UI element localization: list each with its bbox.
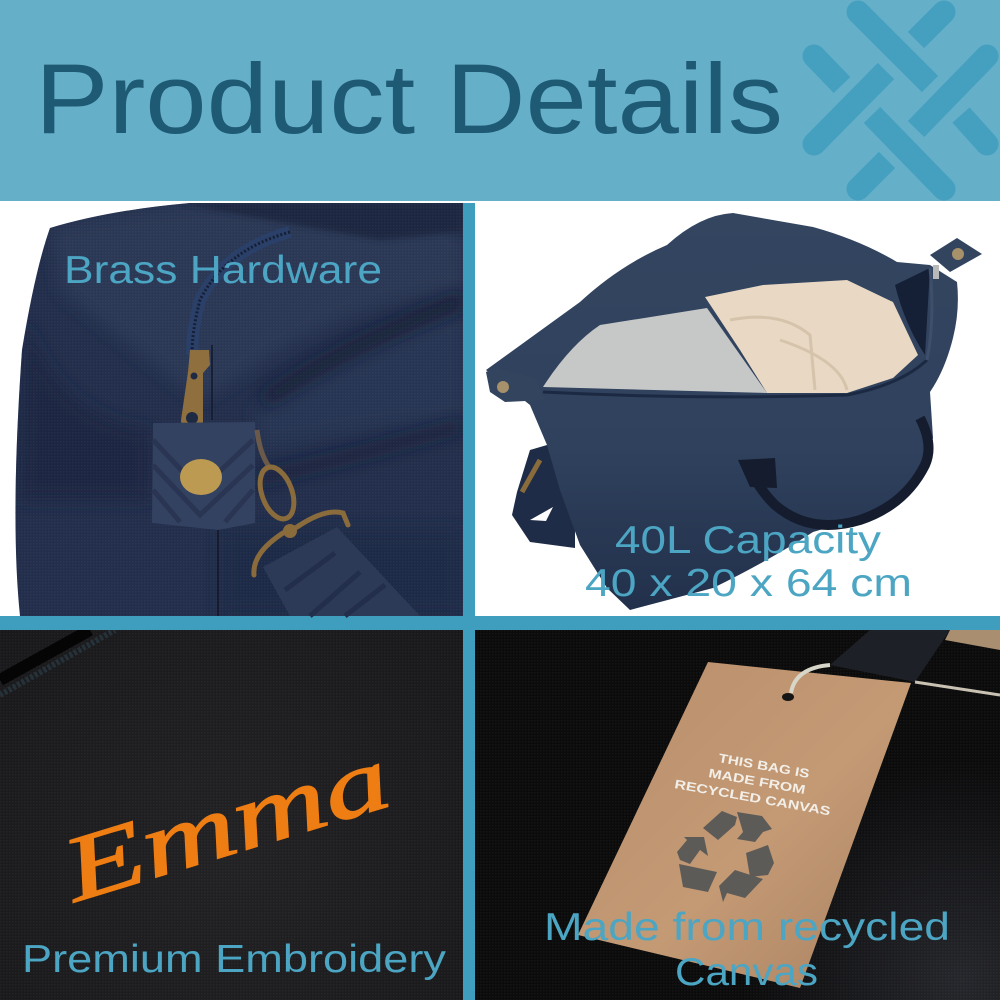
dividers — [0, 203, 1000, 1000]
handle — [738, 458, 777, 488]
icon: zipper pull — [181, 350, 210, 429]
header banner — [0, 0, 1000, 201]
corner tabs — [486, 371, 525, 402]
icon: brass rivet — [180, 459, 222, 495]
shoulder strap — [263, 527, 420, 616]
bag body — [486, 213, 958, 610]
strap tab with rivet — [152, 422, 255, 530]
panel: embroidery photo — [0, 630, 463, 1000]
label: Made from recycled: Made from recycled — [544, 906, 950, 949]
panel: recycled canvas photo — [475, 630, 1000, 1000]
bag body — [15, 203, 463, 616]
label: 40L Capacity: 40L Capacity — [615, 519, 882, 562]
strap — [830, 630, 950, 682]
tag hole and string — [782, 693, 794, 701]
icon: recycling symbol — [677, 811, 774, 902]
panel: 40L capacity photo — [475, 203, 1000, 616]
tag text: MADE FROM — [707, 766, 806, 797]
zipper line — [543, 360, 927, 397]
zipper — [0, 630, 90, 680]
tag text: RECYCLED CANVAS — [673, 777, 832, 818]
title: Product Details — [35, 43, 783, 154]
dark interior — [895, 268, 930, 355]
label: dimensions: 40 x 20 x 64 cm — [585, 562, 912, 605]
hang tag — [578, 662, 911, 988]
strap and clasp at left — [512, 445, 575, 548]
label: Brass Hardware: Brass Hardware — [64, 249, 382, 292]
embroidered name: Emma — [48, 726, 401, 922]
cream shirt — [705, 280, 918, 393]
zipper — [192, 232, 290, 355]
tag text — [675, 754, 830, 815]
icon: woven cross logo — [802, 0, 998, 200]
tag text: THIS BAG IS — [717, 751, 811, 781]
label: Premium Embroidery: Premium Embroidery — [22, 938, 447, 981]
grey sweater — [543, 308, 767, 393]
icon: swivel clasp — [254, 430, 348, 575]
label: Canvas: Canvas — [675, 951, 818, 994]
panel: brass hardware photo — [0, 203, 463, 616]
